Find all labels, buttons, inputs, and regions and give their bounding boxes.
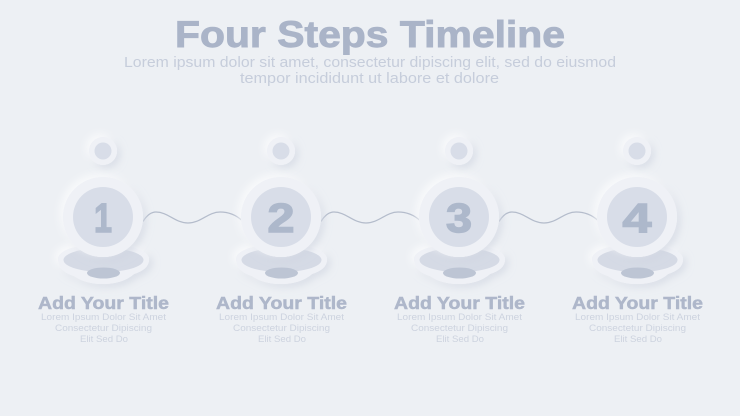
step 3 [394, 137, 525, 345]
step heading: Add Your Title [216, 293, 347, 313]
step description: Consectetur Dipiscing [411, 323, 508, 334]
number badge: 3 [446, 195, 472, 241]
number badge: 4 [622, 195, 652, 241]
step description: Elit Sed Do [80, 334, 128, 345]
number badge [63, 177, 143, 257]
subtitle text: Lorem ipsum dolor sit amet, consectetur dipiscing elit, sed do eiusmod [124, 54, 616, 71]
subtitle text [124, 54, 616, 87]
step description [219, 312, 344, 345]
step description: Elit Sed Do [436, 334, 484, 345]
step description: Lorem Ipsum Dolor Sit Amet [219, 312, 344, 323]
pedestal base [236, 244, 327, 284]
step heading: Add Your Title [394, 293, 525, 313]
icon: small dot [623, 137, 651, 165]
step 2 [216, 137, 347, 345]
step heading: Add Your Title [38, 293, 169, 313]
step description: Consectetur Dipiscing [55, 323, 152, 334]
step description: Consectetur Dipiscing [589, 323, 686, 334]
step description: Elit Sed Do [614, 334, 662, 345]
step description [575, 312, 700, 345]
number badge [419, 177, 499, 257]
step description: Lorem Ipsum Dolor Sit Amet [41, 312, 166, 323]
step description: Lorem Ipsum Dolor Sit Amet [397, 312, 522, 323]
number badge [241, 177, 321, 257]
step description [397, 312, 522, 345]
icon: small dot [445, 137, 473, 165]
pedestal base [592, 244, 683, 284]
step heading: Add Your Title [572, 293, 703, 313]
step 4 [572, 137, 703, 345]
connector: wave 1 to 2 [143, 212, 242, 223]
icon: small dot [89, 137, 117, 165]
title: Four Steps Timeline [175, 14, 565, 55]
step 1 [38, 137, 169, 345]
subtitle text: tempor incididunt ut labore et dolore [240, 70, 499, 87]
step description: Consectetur Dipiscing [233, 323, 330, 334]
step description: Elit Sed Do [258, 334, 306, 345]
number badge: 2 [268, 195, 294, 241]
pedestal base [414, 244, 505, 284]
step description [41, 312, 166, 345]
connector: wave 3 to 4 [499, 212, 598, 223]
number badge [597, 177, 677, 257]
step description: Lorem Ipsum Dolor Sit Amet [575, 312, 700, 323]
number badge: 1 [94, 195, 112, 241]
pedestal base [58, 244, 149, 284]
icon: small dot [267, 137, 295, 165]
connector: wave 2 to 3 [321, 212, 420, 223]
